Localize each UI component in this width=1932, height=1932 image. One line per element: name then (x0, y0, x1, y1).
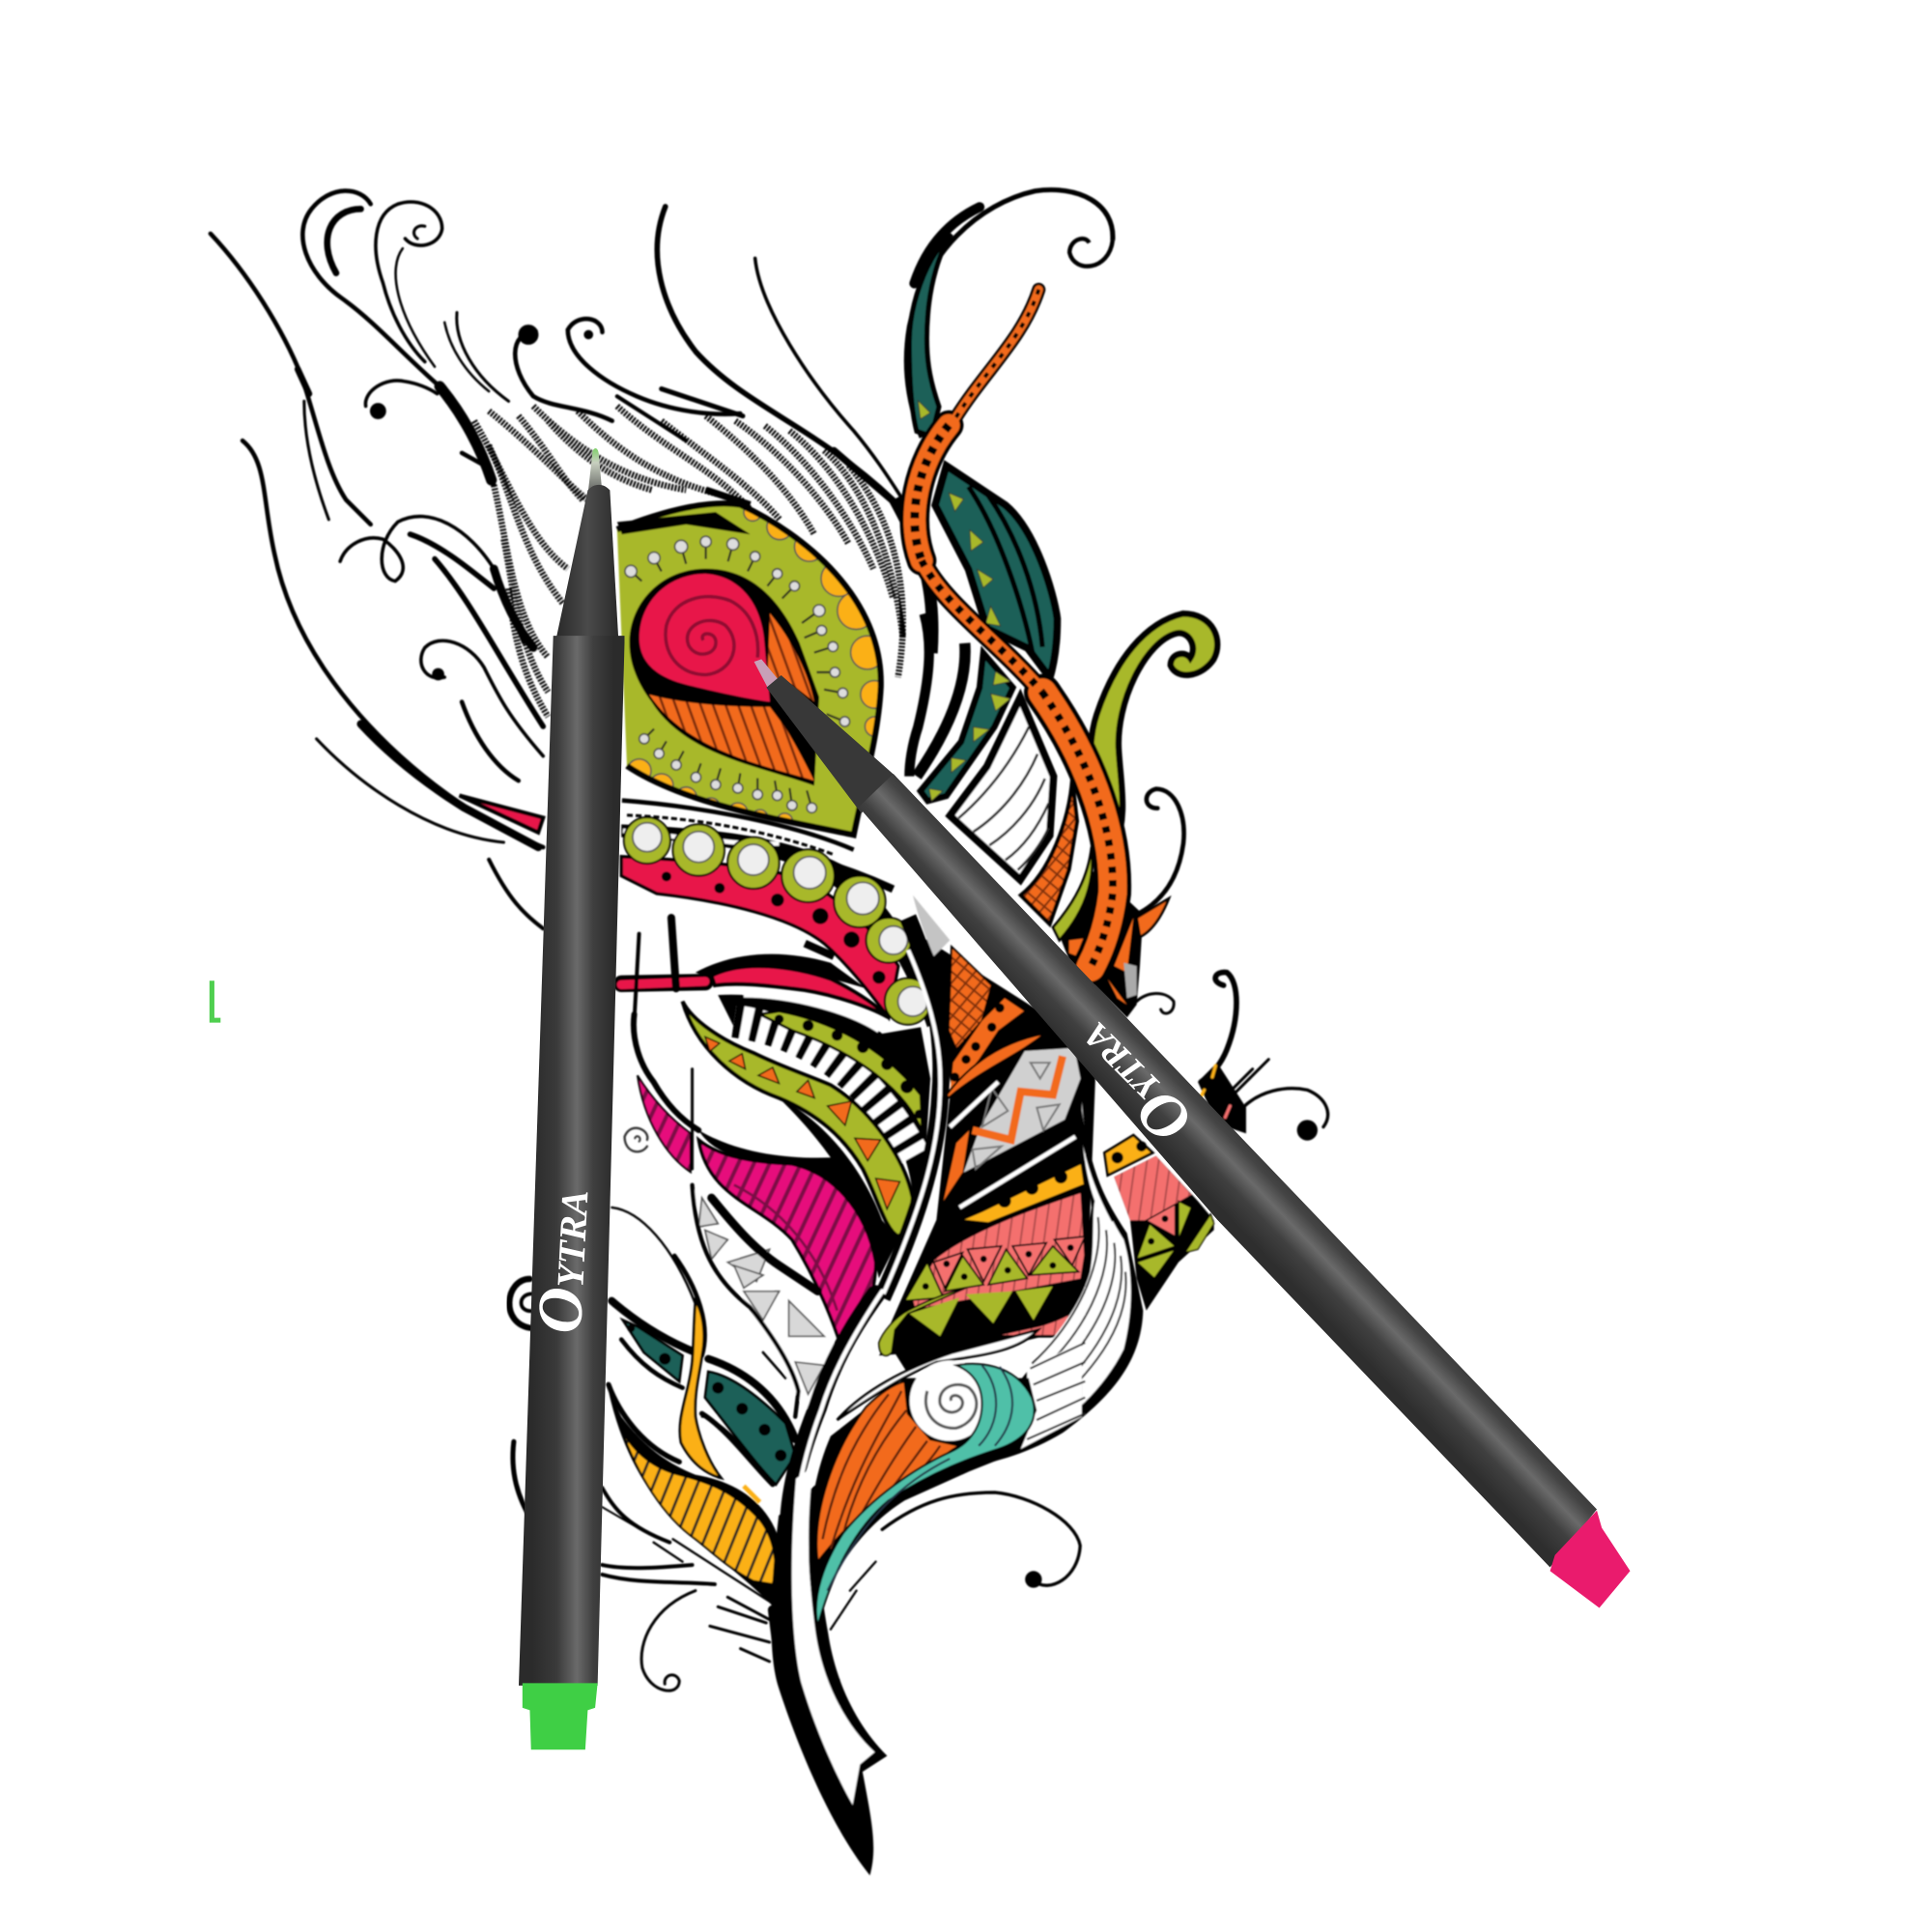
eye: orange lower flame (649, 695, 814, 781)
black field under triangles (879, 1278, 1101, 1355)
pen cap: green (523, 1683, 598, 1749)
orange fan (816, 1381, 959, 1562)
white blade continuation (1021, 1340, 1082, 1449)
white striped blade and right panel (963, 1092, 1214, 1468)
green sliver beside ribbon (1053, 847, 1093, 940)
pen tip: green (587, 448, 603, 496)
white sweep (838, 1330, 1038, 1420)
scallops (624, 817, 931, 1025)
eye: green body (617, 503, 881, 835)
red barb accent (460, 795, 543, 833)
magenta leaf (638, 1075, 691, 1172)
eye: seeds (625, 536, 850, 812)
green strap (879, 1288, 966, 1355)
left black curves (611, 1014, 698, 1304)
large lower green triangles (910, 1287, 1053, 1336)
dotted hatching fan (474, 406, 903, 717)
grey zigzag and orange chevrons (913, 895, 1082, 1208)
triangle row: green (905, 1246, 1079, 1301)
white sliver (744, 995, 879, 1031)
white blade (1017, 1101, 1131, 1449)
eye: yellow scallops (627, 503, 888, 829)
eye of the feather (617, 490, 893, 889)
brand label: OYTRA (1059, 1010, 1206, 1157)
pen cone (555, 485, 618, 640)
yellow leaf (621, 1430, 775, 1584)
eye: seed stems (631, 542, 844, 808)
coral hatch panel (911, 1191, 1088, 1336)
orange dotted ribbon (915, 290, 1113, 967)
blade center line (1079, 1108, 1114, 1220)
stem upper (882, 918, 941, 1297)
green swirl (1091, 613, 1217, 850)
black stroke beside teal ribbon (895, 499, 932, 653)
bottom swirl with dot (831, 1492, 1080, 1630)
grey leaf (693, 1185, 838, 1410)
feather strands: upper left (211, 190, 903, 928)
triangle bands central (838, 1162, 1101, 1420)
left small curls by the pen (509, 1279, 532, 1521)
black wedge behind stripes (718, 995, 930, 1239)
eye: red spiral (639, 574, 770, 702)
lower left strands (602, 1488, 780, 1690)
black sweep under yellow leaf (609, 1391, 792, 1616)
right coral panel (1114, 1156, 1214, 1311)
green dotted band (760, 1011, 923, 1133)
triangle row: coral (934, 1236, 1085, 1288)
red band (621, 857, 898, 1017)
pen barrel (519, 636, 625, 1686)
green letter fragment at left edge (210, 980, 220, 1023)
black strokes around teal (609, 1256, 795, 1485)
pen cap: pink (1550, 1511, 1631, 1608)
eye: black ring (630, 569, 819, 785)
pen barrel (859, 774, 1597, 1567)
white inside of feather base (792, 1466, 875, 1805)
grey triangle leaf and teal and yellow leaves (602, 1185, 882, 1690)
green triangle leaf (683, 1002, 913, 1236)
red band dots (662, 871, 886, 983)
black sweep under the eye (622, 490, 893, 889)
pen tip: pink (754, 659, 779, 690)
pen cone (766, 675, 895, 813)
black wedge under green leaf (698, 1098, 898, 1278)
feather base (771, 1479, 887, 1875)
right central backdrop (885, 936, 1096, 1370)
peacock feather illustration (211, 189, 1328, 1875)
yellow S accent (680, 1301, 722, 1478)
red stroke left (621, 918, 705, 1021)
black lash above red stroke (696, 954, 867, 988)
eye: black top wedge (617, 512, 751, 534)
brand label: OYTRA (525, 1188, 603, 1335)
upper right orange cluster (1021, 780, 1169, 1017)
yellow dotted band (959, 1162, 1085, 1224)
small right curls and spray (1137, 789, 1328, 1141)
mint wave (816, 1364, 1035, 1626)
eye: orange upper flame (767, 613, 814, 702)
teal ribbon with top curl (906, 189, 1113, 801)
red stroke (712, 966, 889, 1017)
black underlay (809, 1378, 1082, 1630)
upper stem highlight (884, 950, 940, 1293)
white striped fan (950, 697, 1054, 880)
right yellow dotted panel (1104, 1135, 1152, 1176)
stripes band (734, 1021, 915, 1156)
pen: green, vertical (519, 448, 625, 1749)
white spiral (910, 1360, 990, 1441)
orange and mint swirl (809, 1340, 1085, 1630)
trunk (789, 1292, 882, 1674)
black mass under scallops (621, 824, 940, 1027)
pen: pink, diagonal (754, 659, 1631, 1608)
white slivers (623, 831, 780, 843)
outer black of blade (963, 1092, 1143, 1468)
teal band (623, 1321, 683, 1381)
eye: outline (617, 503, 881, 835)
central left cluster (611, 817, 941, 1350)
